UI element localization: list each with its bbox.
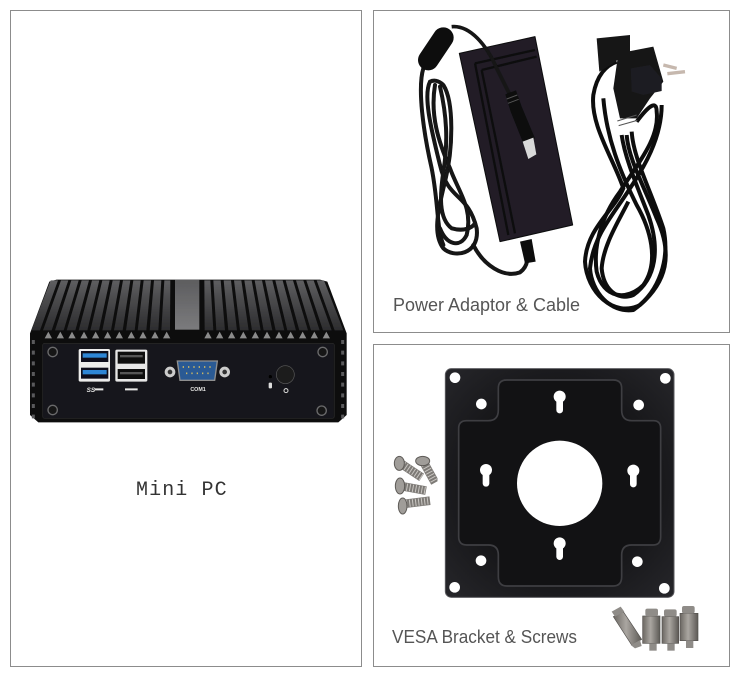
heat sink fins <box>31 280 343 330</box>
USB 2 ports <box>115 350 147 382</box>
port labels <box>87 387 206 394</box>
side scallops <box>33 340 343 418</box>
panel: VESA bracket and screws <box>374 344 730 666</box>
caption: Power Adaptor & Cable: Power Adaptor & Cable <box>393 294 580 315</box>
icon: standoffs <box>612 606 698 651</box>
output cable and ferrite <box>452 27 512 98</box>
panel screws <box>48 347 327 415</box>
panel: power adaptor and cable <box>374 10 730 332</box>
adaptor cable coil <box>421 68 528 274</box>
icon: small screws <box>394 456 435 514</box>
icon: VESA bracket <box>445 369 674 597</box>
bracket holes <box>449 372 671 594</box>
port labels: COM1 <box>190 387 206 393</box>
icon: mini PC product <box>30 280 347 422</box>
adaptor body <box>459 37 573 242</box>
port labels: SS <box>87 387 96 394</box>
front panel <box>43 343 334 418</box>
icon: power cord <box>585 35 685 310</box>
icon: power adaptor <box>421 27 573 274</box>
caption: Mini PC: Mini PC <box>136 479 228 502</box>
USB 3 ports <box>79 349 110 382</box>
DC plug <box>505 90 535 143</box>
fin tips <box>45 332 330 338</box>
caption: VESA Bracket & Screws: VESA Bracket & Screws <box>392 626 577 647</box>
power button <box>269 366 294 393</box>
centre bar <box>175 280 199 330</box>
panel: mini PC <box>10 10 362 666</box>
COM port <box>165 361 230 380</box>
